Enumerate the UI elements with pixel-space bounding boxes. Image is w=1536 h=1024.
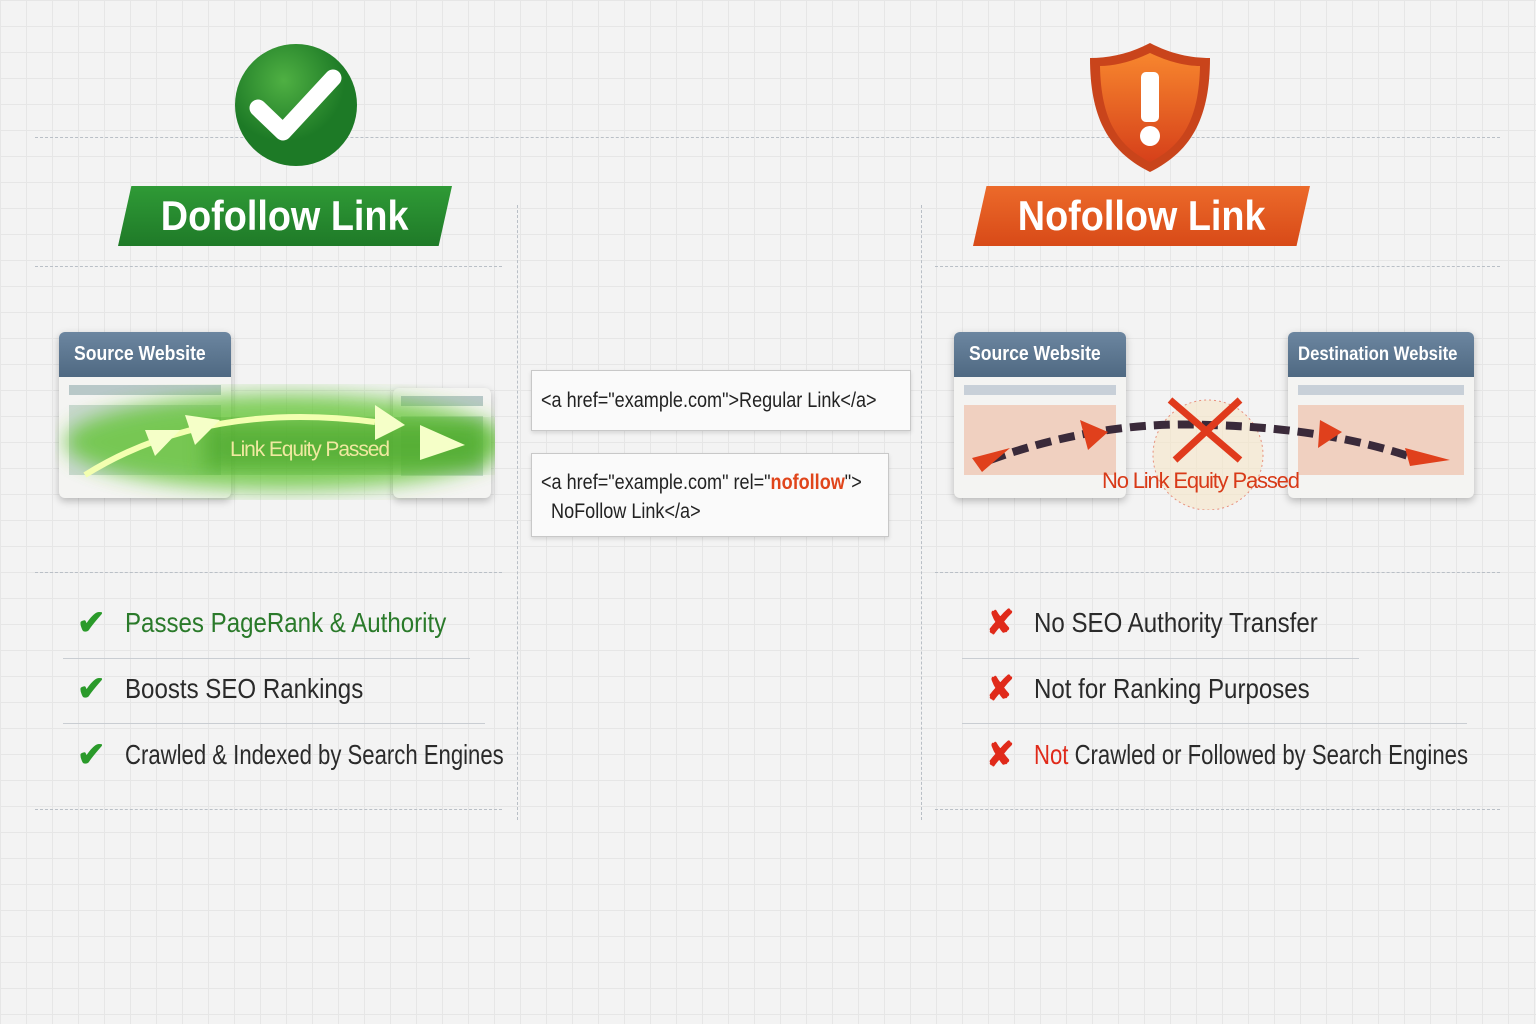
item 1 (986, 604, 1318, 642)
blocked arrow: No Link Equity Passed (1102, 468, 1300, 493)
blocked arrow (972, 397, 1450, 510)
source window: Source Website (74, 343, 206, 365)
code: regular link: <a href="example.com">Regular Link</a> (541, 389, 877, 412)
list: nofollow drawbacks (962, 604, 1468, 774)
item 1: ✔ (77, 604, 106, 642)
heading: dofollow: Dofollow Link (161, 192, 409, 239)
code: nofollow link: <a href="example.com" rel="nofollow"> (541, 471, 862, 494)
diagram: dofollow (55, 331, 495, 505)
item 3: ✔ (77, 736, 106, 774)
heading: dofollow (118, 186, 452, 246)
item 1: No SEO Authority Transfer (1034, 607, 1318, 638)
destination window: Destination Website (1298, 344, 1457, 365)
source window: Source Website (969, 343, 1101, 365)
item 1: ✘ (986, 604, 1014, 642)
list: dofollow benefits (63, 604, 504, 774)
item 2 (986, 670, 1310, 708)
source window (954, 332, 1126, 498)
item 2: ✔ (77, 670, 106, 708)
heading: nofollow (973, 186, 1310, 246)
item 2: Not for Ranking Purposes (1034, 673, 1310, 704)
icon: green check (235, 44, 357, 166)
heading: nofollow: Nofollow Link (1018, 192, 1265, 239)
equity arrow glow (55, 384, 495, 500)
item 3: Not Crawled or Followed by Search Engines (1034, 739, 1468, 770)
code: nofollow link (531, 453, 889, 537)
diagram: nofollow (950, 331, 1478, 510)
code: nofollow link: NoFollow Link</a> (551, 500, 701, 523)
item 3: Crawled & Indexed by Search Engines (125, 739, 504, 770)
item 2: Boosts SEO Rankings (125, 673, 363, 704)
destination window (393, 388, 491, 498)
source window (59, 332, 231, 498)
item 3: ✘ (986, 736, 1014, 774)
item 2 (77, 670, 363, 708)
item 2: ✘ (986, 670, 1014, 708)
destination window (1288, 332, 1474, 498)
equity arrow glow: Link Equity Passed (230, 438, 390, 461)
code: regular link (531, 370, 911, 431)
item 1: Passes PageRank & Authority (125, 607, 446, 638)
icon: warning shield (1090, 43, 1210, 172)
